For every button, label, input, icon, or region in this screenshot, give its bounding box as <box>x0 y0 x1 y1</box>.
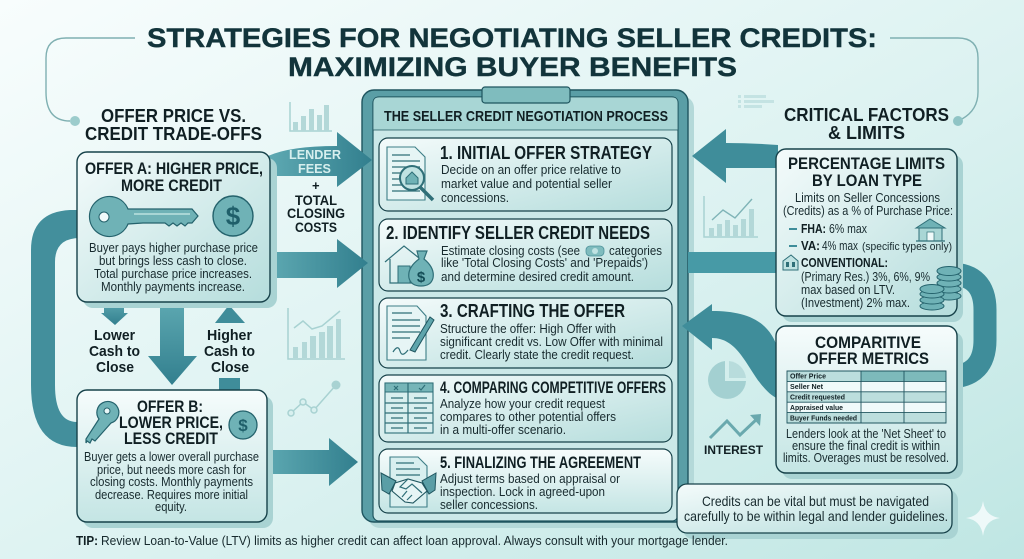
label: lower cash to close <box>89 327 140 376</box>
arrow: right U connector <box>950 274 985 377</box>
metrics table: Seller Net <box>790 382 823 391</box>
panel: percentage limits: Limits on Seller Concessions <box>795 190 940 205</box>
panel: offer B: Buyer gets a lower overall purchase <box>84 449 259 464</box>
step 5 card <box>379 449 672 513</box>
panel: offer A <box>77 152 277 308</box>
VA limit: 4% max <box>822 238 858 253</box>
icon: dollar coin A <box>213 196 253 236</box>
panel: offer B: decrease. Requires more initial <box>95 487 248 502</box>
icon: sparkle <box>966 501 1000 536</box>
step 3 card: Structure the offer: High Offer with <box>440 321 616 336</box>
metrics table: Offer Price <box>790 372 826 380</box>
label: total closing costs: + <box>312 178 320 193</box>
title <box>147 23 877 82</box>
icon: coin stacks <box>920 266 961 310</box>
title: MAXIMIZING BUYER BENEFITS <box>288 52 737 82</box>
panel: offer B: equity. <box>155 499 187 514</box>
arrow: curved from comparative metrics <box>682 304 778 399</box>
metrics table <box>787 371 946 423</box>
step 5 card: Adjust terms based on appraisal or <box>440 471 621 486</box>
step 2 card: categories <box>609 243 662 258</box>
step 5 card: inspection. Lock in agreed-upon <box>440 484 605 499</box>
panel: offer A: Monthly payments increase. <box>101 279 245 294</box>
panel: offer A: but brings less cash to close. <box>99 253 247 268</box>
label: higher cash to close: Close <box>211 359 249 376</box>
step 1 card <box>379 138 672 211</box>
step 4 card: 4. COMPARING COMPETITIVE OFFERS <box>440 378 666 397</box>
panel: offer B: closing costs. Monthly payments <box>90 474 253 489</box>
step 5 card: seller concessions. <box>440 497 538 512</box>
icon: key <box>89 196 198 236</box>
label: total closing costs: COSTS <box>295 220 337 235</box>
panel: offer A: Buyer pays higher purchase price <box>89 240 258 255</box>
step 1 card: market value and potential seller <box>441 176 613 191</box>
arrow: lender fees into process <box>268 132 372 187</box>
clipboard clip <box>482 87 570 103</box>
label: lower cash to close: Cash to <box>89 343 140 360</box>
title: STRATEGIES FOR NEGOTIATING SELLER CREDITS: <box>147 23 877 53</box>
background chart: dotted line <box>288 380 340 416</box>
step 2 card: and determine desired credit amount. <box>441 269 634 284</box>
arrow: offer B into process <box>265 438 358 486</box>
step 3 card: credit. Clearly state the credit request. <box>440 347 634 362</box>
step 2 card: Estimate closing costs (see <box>441 243 580 258</box>
step 4 card: compares to other potential offers <box>440 409 616 424</box>
panel: comparative offer metrics <box>776 326 963 479</box>
background chart: bars with line <box>288 308 345 359</box>
icon: cash note <box>586 246 604 256</box>
icon: dollar coin A: $ <box>226 201 241 231</box>
panel: comparative offer metrics: limits. Overages must be resolved. <box>783 450 949 465</box>
FHA limit <box>789 221 867 236</box>
step 4 card <box>379 375 672 442</box>
label: interest: INTEREST <box>704 443 764 457</box>
arrow label: lender fees <box>289 147 342 176</box>
panel: offer B: LESS CREDIT <box>124 430 218 448</box>
label: lower cash to close: Close <box>96 359 134 376</box>
heading: critical factors and limits <box>784 105 949 143</box>
panel: offer A: OFFER A: HIGHER PRICE, <box>85 159 263 178</box>
conventional limits: (Primary Res.) 3%, 6%, 9% <box>801 269 930 284</box>
metrics table: Appraised value <box>790 403 843 412</box>
panel: offer A: MORE CREDIT <box>121 176 223 195</box>
panel: comparative offer metrics: OFFER METRICS <box>807 349 929 368</box>
icon: comparison table <box>385 383 433 433</box>
heading: critical factors and limits: & LIMITS <box>828 123 905 143</box>
callout: summary note: Credits can be vital but must be navigated <box>702 493 929 509</box>
label: higher cash to close: Cash to <box>204 343 255 360</box>
step 1 card: 1. INITIAL OFFER STRATEGY <box>440 143 652 163</box>
process heading: THE SELLER CREDIT NEGOTIATION PROCESS <box>384 108 668 125</box>
step 4 card: in a multi-offer scenario. <box>440 422 566 437</box>
arrow label: lender fees: FEES <box>298 161 331 176</box>
step 4 card: Analyze how your credit request <box>440 396 605 411</box>
panel: offer A: Total purchase price increases. <box>94 266 252 281</box>
arrow: higher cash to close <box>215 305 245 392</box>
heading: critical factors and limits: CRITICAL FACTORS <box>784 105 949 125</box>
panel: percentage limits <box>776 149 963 322</box>
arrow: large down arrow <box>148 300 197 385</box>
FHA limit: 6% max <box>829 221 867 236</box>
heading: offer price vs credit trade-offs: OFFER PRICE VS. <box>101 106 246 126</box>
icon: document with magnifier <box>387 147 433 200</box>
step 2 card: 2. IDENTIFY SELLER CREDIT NEEDS <box>386 223 650 243</box>
panel: clipboard process <box>362 87 694 528</box>
panel: percentage limits: PERCENTAGE LIMITS <box>788 154 945 173</box>
arrow: critical factors into process <box>692 129 778 183</box>
icon: building <box>783 255 798 270</box>
callout: summary note: carefully to be within legal and lender guidelines. <box>684 508 948 524</box>
tip line: Review Loan-to-Value (LTV) limits as higher credit can affect loan approval. Always consult with your mortgage lender. <box>101 533 728 548</box>
FHA limit: FHA: <box>801 221 826 236</box>
step 3 card <box>379 298 672 368</box>
heading: offer price vs credit trade-offs <box>85 106 262 144</box>
panel: comparative offer metrics: Lenders look at the 'Net Sheet' to <box>786 426 946 441</box>
panel: offer B: LOWER PRICE, <box>119 414 223 432</box>
label: total closing costs: CLOSING <box>287 206 345 221</box>
VA limit: VA: <box>801 238 820 253</box>
metrics table: Buyer Funds needed <box>790 414 857 422</box>
step 3 card: 3. CRAFTING THE OFFER <box>440 301 625 321</box>
arrow: lower cash to close <box>101 300 128 325</box>
arrow: horizontal band <box>688 252 778 273</box>
conventional limits <box>801 255 930 310</box>
VA limit: (specific types only) <box>862 241 952 253</box>
step 1 card: concessions. <box>441 190 509 205</box>
heading: offer price vs credit trade-offs: CREDIT TRADE-OFFS <box>85 124 262 144</box>
label: total closing costs <box>287 178 345 235</box>
background icon: list lines <box>738 95 774 108</box>
panel: offer B <box>77 390 273 528</box>
step 1 card: Decide on an offer price relative to <box>441 162 621 177</box>
tip line: TIP: <box>76 533 98 548</box>
icon: dollar coin B <box>229 411 257 439</box>
icon: angled key <box>86 401 119 443</box>
icon: house and money bag <box>385 246 433 286</box>
label: total closing costs: TOTAL <box>295 193 337 208</box>
right header connector line <box>890 38 978 126</box>
panel: comparative offer metrics: ensure the final credit is within <box>792 438 940 453</box>
icon: handshake over document <box>381 457 436 507</box>
left header connector line <box>46 38 135 126</box>
panel: offer B: OFFER B: <box>137 398 203 416</box>
icon: dollar coin B: $ <box>238 416 248 435</box>
VA limit <box>789 238 952 253</box>
arrow: total closing costs into process <box>268 239 368 288</box>
panel: percentage limits: BY LOAN TYPE <box>812 171 922 190</box>
arrow label: lender fees: LENDER <box>289 147 342 162</box>
conventional limits: (Investment) 2% max. <box>801 295 910 310</box>
label: lower cash to close: Lower <box>94 327 135 344</box>
conventional limits: CONVENTIONAL: <box>801 255 888 270</box>
arrow: U-shaped connector between offers <box>31 210 80 447</box>
icon: interest trend arrow <box>710 414 761 438</box>
metrics table: Credit requested <box>790 392 845 402</box>
step 3 card: significant credit vs. Low Offer with minimal <box>440 334 663 349</box>
step 2 card: like 'Total Closing Costs' and 'Prepaids') <box>441 255 648 270</box>
label: higher cash to close <box>204 327 255 376</box>
icon: pie chart <box>708 361 746 399</box>
step 5 card: 5. FINALIZING THE AGREEMENT <box>440 453 641 472</box>
panel: percentage limits: (Credits) as a % of Purchase Price: <box>783 203 953 218</box>
conventional limits: max based on LTV. <box>801 282 895 297</box>
step 2 card <box>379 219 672 291</box>
icon: document with pen <box>387 306 434 360</box>
background chart: right side <box>704 196 758 237</box>
icon: house and money bag: $ <box>417 269 426 286</box>
callout: summary note <box>677 484 958 539</box>
icon: house <box>916 219 945 241</box>
panel: offer B: price, but needs more cash for <box>97 462 247 477</box>
panel: comparative offer metrics: COMPARITIVE <box>815 333 921 352</box>
label: higher cash to close: Higher <box>207 327 252 344</box>
background chart: bars top <box>290 102 332 131</box>
